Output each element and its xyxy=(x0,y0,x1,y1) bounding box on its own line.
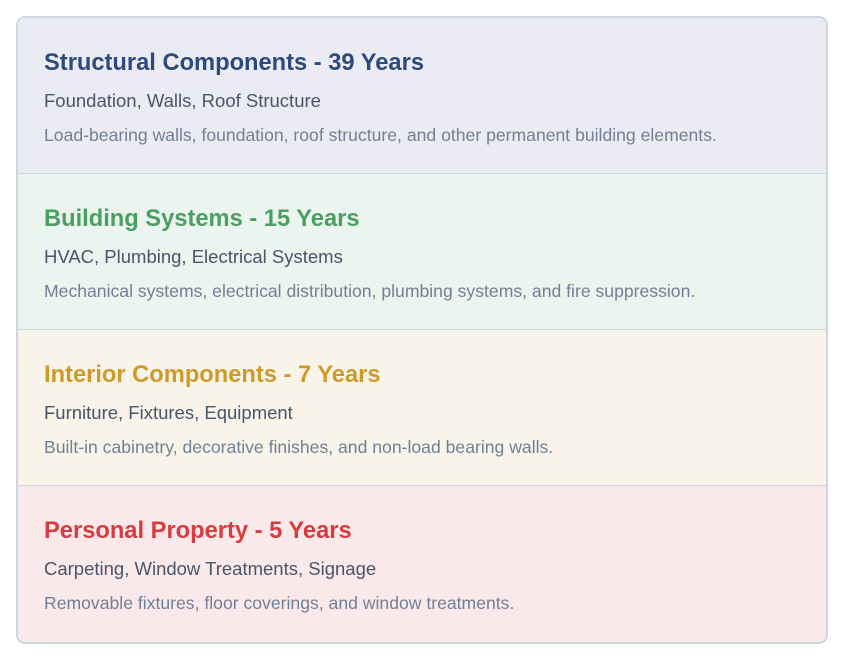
panel: building systems: Mechanical systems, electrical distribution, plumbing systems, and fire suppression. xyxy=(44,281,695,301)
panel: structural: Load-bearing walls, foundation, roof structure, and other permanent building elements. xyxy=(44,125,717,145)
panel: personal property: Personal Property - 5 Years xyxy=(44,518,352,544)
panel: interior xyxy=(18,330,826,486)
panel: building systems: Building Systems - 15 Years xyxy=(44,206,360,232)
panel: interior: Interior Components - 7 Years xyxy=(44,362,381,388)
panel: building systems: HVAC, Plumbing, Electrical Systems xyxy=(44,246,343,267)
panel: building systems xyxy=(18,174,826,330)
panel: structural: Foundation, Walls, Roof Structure xyxy=(44,90,321,111)
panel: personal property: Removable fixtures, floor coverings, and window treatments. xyxy=(44,593,514,613)
panel: structural: Structural Components - 39 Years xyxy=(44,50,424,76)
panel: structural xyxy=(18,18,826,174)
panel: personal property xyxy=(18,486,826,643)
panel: interior: Built-in cabinetry, decorative finishes, and non-load bearing walls. xyxy=(44,437,553,457)
panel: personal property: Carpeting, Window Treatments, Signage xyxy=(44,558,376,579)
panel: interior: Furniture, Fixtures, Equipment xyxy=(44,402,293,423)
